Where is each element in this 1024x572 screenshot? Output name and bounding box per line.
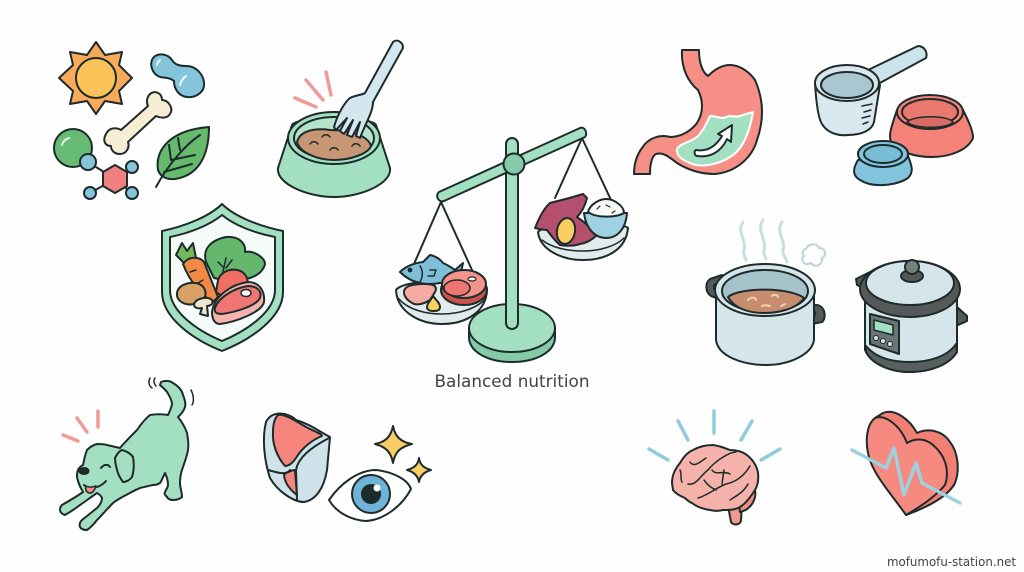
- large star: [375, 426, 412, 463]
- icon: blue dumbbell molecule: [151, 54, 204, 97]
- cup body: [815, 83, 880, 135]
- pot body: [716, 292, 814, 365]
- steak on left pan: [441, 270, 487, 305]
- pupil: [361, 484, 381, 504]
- mushroom: [194, 298, 213, 316]
- pot handles: [706, 275, 722, 300]
- rice bowl: [584, 199, 627, 238]
- cooker lid: [860, 261, 960, 317]
- icon: meat cut: [264, 414, 330, 502]
- bowl: [278, 118, 390, 197]
- icon: green sphere: [54, 129, 92, 167]
- potato: [177, 283, 205, 305]
- watermark: mofumofu-station.net: [887, 555, 1016, 569]
- control panel: [870, 314, 899, 354]
- pink excitement lines: [295, 72, 331, 107]
- pink excitement lines: [63, 411, 98, 441]
- meat on left pan: [404, 284, 436, 304]
- greens: [205, 237, 265, 282]
- stomach body: [634, 50, 762, 174]
- fork: [334, 41, 403, 138]
- fish: [400, 255, 463, 284]
- cooker handles: [856, 272, 872, 292]
- left pan strings: [414, 202, 472, 270]
- icon: measuring cup: [815, 46, 927, 135]
- steak: [212, 282, 264, 324]
- soup: [728, 290, 804, 313]
- icon: cooking pot: [706, 264, 825, 365]
- pulse line: [852, 448, 960, 503]
- rays: [649, 411, 780, 460]
- icon: playful dog: [60, 378, 193, 530]
- dog body: [60, 381, 188, 530]
- cup scale marks: [862, 104, 872, 124]
- beam: [437, 128, 586, 201]
- pole: [506, 138, 518, 329]
- dog ear: [115, 450, 134, 482]
- dog tongue: [86, 486, 96, 493]
- right pan strings: [555, 138, 611, 200]
- heart: [867, 412, 958, 515]
- icon: stomach: [634, 50, 762, 174]
- icon: balance scale: [396, 128, 628, 362]
- icon: steam and cloud: [741, 220, 825, 266]
- icon: red bowl: [890, 95, 973, 157]
- carrot: [176, 243, 218, 302]
- pivot: [504, 154, 524, 174]
- eye highlight: [374, 484, 380, 492]
- eye outline: [329, 470, 411, 521]
- arrow in stomach: [695, 125, 732, 156]
- icon: sun: [59, 42, 132, 114]
- stomach contents: [677, 112, 753, 165]
- left pan: [396, 281, 487, 324]
- shield: [162, 204, 283, 351]
- icon: heart with pulse: [852, 412, 960, 515]
- icon: shield with vegetables and meat: [162, 204, 283, 351]
- tail wiggle marks: [149, 378, 193, 405]
- dog eye and mouth: [84, 465, 110, 488]
- heading: balanced nutrition label: Balanced nutrition: [434, 372, 590, 392]
- lid knob: [901, 270, 923, 282]
- dog nose: [80, 468, 88, 474]
- iris: [352, 475, 390, 513]
- icon: sparkling eye: [329, 426, 431, 521]
- small star: [407, 458, 431, 482]
- yolk drop: [427, 296, 440, 311]
- icon: green leaf: [156, 127, 209, 187]
- cooker body: [865, 290, 957, 372]
- icon: bone: [104, 92, 171, 154]
- icon: blue bowl: [854, 141, 912, 185]
- icon: slow cooker: [856, 260, 967, 372]
- brain: [672, 445, 758, 524]
- icon: molecule: [80, 154, 138, 199]
- icon: green bowl with fork: [278, 41, 403, 197]
- icon group: vitamins and minerals: [54, 42, 209, 199]
- food: [297, 129, 371, 160]
- tomato: [216, 270, 248, 296]
- base: [469, 304, 555, 362]
- handle: [868, 46, 927, 84]
- right pan: [538, 223, 628, 260]
- icon: brain with rays: [649, 411, 780, 524]
- sweet potato: [535, 194, 597, 246]
